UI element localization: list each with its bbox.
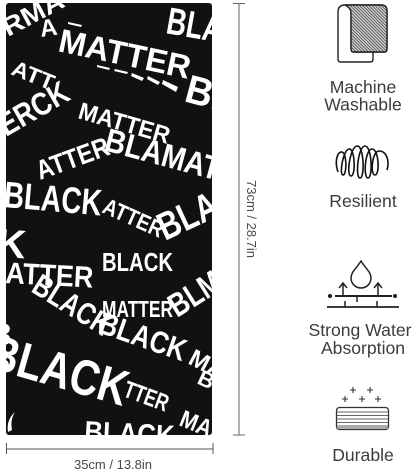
panel: black towel with repeated words: MAT [176, 406, 227, 447]
panel: black towel with repeated words: TTER [120, 376, 172, 417]
panel: black towel with repeated words: B [194, 365, 219, 394]
panel: black towel with repeated words: ATTER [32, 131, 113, 186]
panel: black towel with repeated words: BLACK [102, 247, 173, 277]
panel: black towel with repeated words: BLACK [2, 174, 104, 224]
icon: spring coil [336, 146, 388, 178]
panel: black towel with repeated words: MATTER [102, 296, 173, 322]
panel: black towel with repeated words: BLA [163, 1, 226, 52]
panel: black towel with repeated words: ATT [8, 55, 59, 95]
panel: black towel with repeated words: BLACK [84, 416, 175, 453]
panel: black towel with repeated words: ATTER [99, 193, 168, 243]
label: strong water absorption: Absorption [321, 338, 405, 358]
panel: black towel with repeated words: BLM [161, 263, 228, 324]
panel: black towel with repeated words: A [38, 14, 59, 43]
panel: black towel with repeated words: BLACK [26, 267, 118, 343]
height label: 73cm / 28.7in [244, 180, 259, 258]
label: machine washable: Machine [330, 77, 396, 97]
panel: black towel with repeated words: MATTER [56, 22, 194, 86]
label: resilient: Resilient [329, 191, 397, 211]
panel: black towel with repeated words: BL [181, 67, 240, 123]
panel: black towel with repeated words: ATTER [5, 257, 95, 295]
fragments of a hidden word under MATTER [68, 22, 178, 92]
width label: 35cm / 13.8in [74, 457, 152, 472]
icon: folded towel [338, 5, 387, 62]
height dimension line [233, 4, 259, 435]
icon: durable fabric with sparkles [336, 387, 388, 430]
label: strong water absorption: Strong Water [308, 320, 412, 340]
panel: black towel with repeated words: MATTER [75, 98, 173, 150]
panel: black towel with repeated words: BLACK [95, 306, 192, 368]
label: durable: Durable [332, 445, 394, 465]
width dimension line [6, 443, 213, 472]
label: machine washable: Washable [324, 94, 402, 114]
panel: black towel with repeated words: MA [184, 344, 230, 386]
panel: black towel with repeated words: BLAMAT [101, 121, 225, 187]
panel: black towel with repeated words: BLA [151, 184, 225, 249]
icon: water absorption [327, 261, 399, 307]
panel: black towel with repeated words [6, 3, 212, 435]
